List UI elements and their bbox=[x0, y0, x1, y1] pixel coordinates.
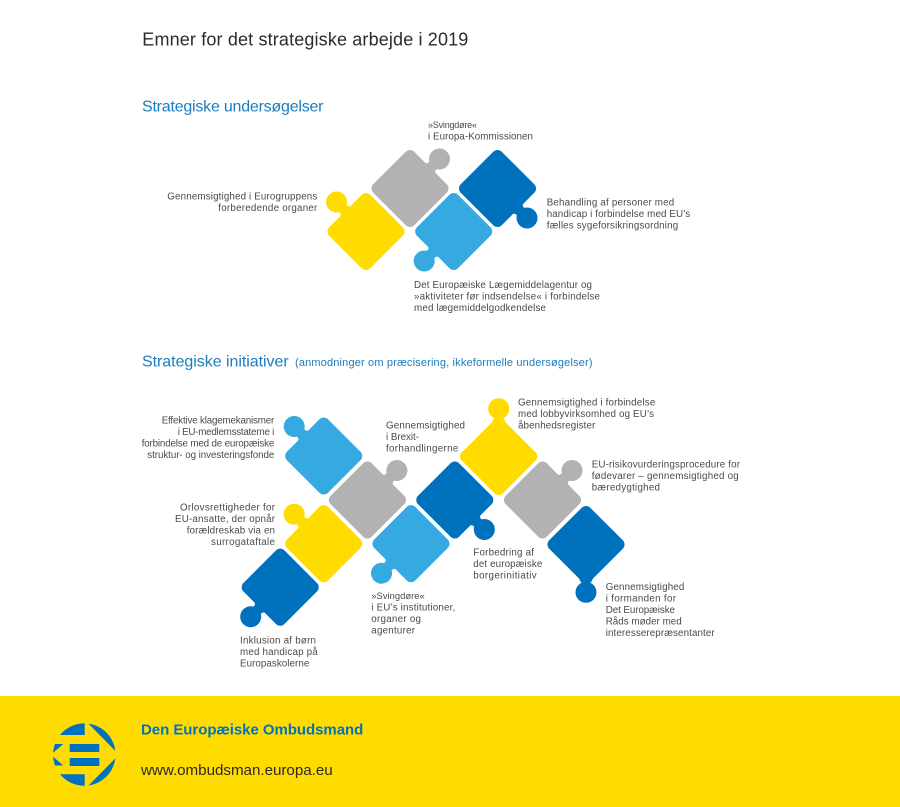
label: Brexit negotiations: i Brexit- bbox=[386, 432, 419, 443]
label: revolving doors in the Commission bbox=[428, 120, 533, 142]
label: Eurogroup transparency bbox=[167, 191, 318, 214]
label: disability insurance bbox=[547, 198, 690, 232]
puzzle piece: yellow, parental leave bbox=[266, 486, 365, 585]
label: Eurogroup transparency: Gennemsigtighed i Eurogruppens bbox=[167, 191, 317, 202]
label: Brexit negotiations: Gennemsigtighed bbox=[386, 421, 465, 432]
label: revolving doors in EU institutions: »Svingdøre« bbox=[371, 590, 425, 601]
heading: strategic initiatives bbox=[142, 354, 592, 371]
title: Emner for det strategiske arbejde i 2019 bbox=[142, 29, 468, 49]
label: citizens' initiative: borgerinitiativ bbox=[473, 571, 537, 582]
puzzle piece: dark blue, Council president bbox=[545, 503, 627, 603]
puzzle piece: yellow, lobbying bbox=[458, 398, 540, 498]
footer band bbox=[0, 696, 900, 807]
footer title: Den Europæiske Ombudsmand bbox=[141, 722, 363, 739]
puzzle piece: light blue, medicines agency bbox=[396, 190, 495, 289]
label: parental leave: surrogataftale bbox=[211, 537, 276, 548]
label: lobbying bbox=[518, 397, 656, 431]
label: complaint mechanisms: forbindelse med de europæiske bbox=[142, 439, 275, 450]
label: European Schools: Inklusion af børn bbox=[240, 635, 316, 646]
puzzle piece: grey, Brexit bbox=[326, 443, 425, 541]
label: medicines agency: Det Europæiske Lægemiddelagentur og bbox=[414, 280, 592, 291]
label: complaint mechanisms: i EU-medlemsstaterne i bbox=[178, 427, 274, 438]
label: revolving doors in EU institutions: organer og bbox=[371, 614, 421, 625]
label: parental leave: Orlovsrettigheder for bbox=[180, 503, 276, 514]
label: Council president bbox=[606, 582, 715, 639]
puzzle piece: light blue, revolving doors in EU institutions bbox=[354, 503, 452, 601]
label: revolving doors in the Commission: »Svingdøre« bbox=[428, 120, 477, 130]
label: complaint mechanisms bbox=[142, 416, 275, 461]
label: food risk assessment: EU-risikovurderingsprocedure for bbox=[592, 460, 741, 471]
label: medicines agency bbox=[414, 280, 601, 314]
label: revolving doors in the Commission: i Europa-Kommissionen bbox=[428, 132, 533, 142]
label: Eurogroup transparency: forberedende organer bbox=[218, 203, 318, 214]
heading: strategic initiatives: (anmodninger om præcisering, ikkeformelle undersøgelser) bbox=[295, 357, 592, 369]
label: disability insurance: handicap i forbindelse med EU’s bbox=[547, 209, 690, 220]
panel: strategic inquiries puzzle bbox=[309, 131, 555, 289]
label: lobbying: med lobbyvirksomhed og EU’s bbox=[518, 409, 654, 420]
label: medicines agency: med lægemiddelgodkendelse bbox=[414, 303, 547, 314]
label: Brexit negotiations: forhandlingerne bbox=[386, 444, 459, 455]
label: complaint mechanisms: Effektive klagemekanismer bbox=[162, 416, 275, 427]
puzzle piece: dark blue, European Schools bbox=[223, 546, 321, 645]
icon: European Ombudsman logo bbox=[53, 723, 116, 786]
label: citizens' initiative: det europæiske bbox=[473, 559, 543, 570]
label: Council president: interesserepræsentanter bbox=[606, 628, 715, 639]
label: parental leave bbox=[175, 503, 276, 548]
label: revolving doors in EU institutions: i EU’s institutioner, bbox=[371, 602, 455, 614]
footer url: www.ombudsman.europa.eu bbox=[140, 762, 333, 779]
label: medicines agency: »aktiviteter før indsendelse« i forbindelse bbox=[414, 292, 601, 302]
label: food risk assessment: bæredygtighed bbox=[592, 483, 660, 494]
label: Council president: i formanden for bbox=[606, 594, 677, 604]
puzzle piece: yellow, Eurogroup bbox=[309, 174, 407, 273]
heading: strategic inquiries: Strategiske undersøgelser bbox=[142, 99, 324, 116]
puzzle piece: grey, food risk assessment bbox=[501, 443, 600, 541]
puzzle piece: dark blue, disability insurance bbox=[456, 147, 555, 246]
label: disability insurance: fælles sygeforsikringsordning bbox=[547, 220, 678, 232]
label: food risk assessment bbox=[592, 460, 741, 494]
label: Council president: Gennemsigtighed bbox=[606, 582, 684, 593]
puzzle piece: grey, revolving doors bbox=[369, 131, 467, 230]
label: European Schools: Europaskolerne bbox=[240, 658, 310, 669]
label: European Schools bbox=[240, 635, 318, 669]
label: citizens' initiative: Forbedring af bbox=[473, 548, 534, 559]
label: citizens' initiative bbox=[473, 548, 543, 582]
panel: strategic initiatives puzzle, right group bbox=[458, 398, 627, 603]
label: Brexit negotiations bbox=[386, 421, 465, 455]
puzzle piece: light blue, complaint mechanisms bbox=[266, 399, 365, 497]
puzzle piece: dark blue, citizens' initiative bbox=[414, 459, 512, 557]
label: parental leave: EU-ansatte, der opnår bbox=[175, 514, 276, 525]
label: lobbying: Gennemsigtighed i forbindelse bbox=[518, 397, 656, 408]
panel: strategic initiatives puzzle, left group bbox=[223, 399, 512, 645]
label: complaint mechanisms: struktur- og investeringsfonde bbox=[147, 450, 275, 461]
label: revolving doors in EU institutions: agenturer bbox=[371, 626, 416, 636]
label: parental leave: forældreskab via en bbox=[187, 526, 275, 537]
label: food risk assessment: fødevarer – gennemsigtighed og bbox=[592, 471, 739, 482]
label: disability insurance: Behandling af personer med bbox=[547, 198, 674, 208]
label: Council president: Det Europæiske bbox=[606, 605, 676, 616]
label: revolving doors in EU institutions bbox=[371, 590, 455, 636]
label: Council president: Råds møder med bbox=[606, 616, 682, 628]
label: European Schools: med handicap på bbox=[240, 647, 318, 658]
label: lobbying: åbenhedsregister bbox=[518, 420, 596, 431]
heading: strategic initiatives: Strategiske initiativer bbox=[142, 354, 289, 371]
